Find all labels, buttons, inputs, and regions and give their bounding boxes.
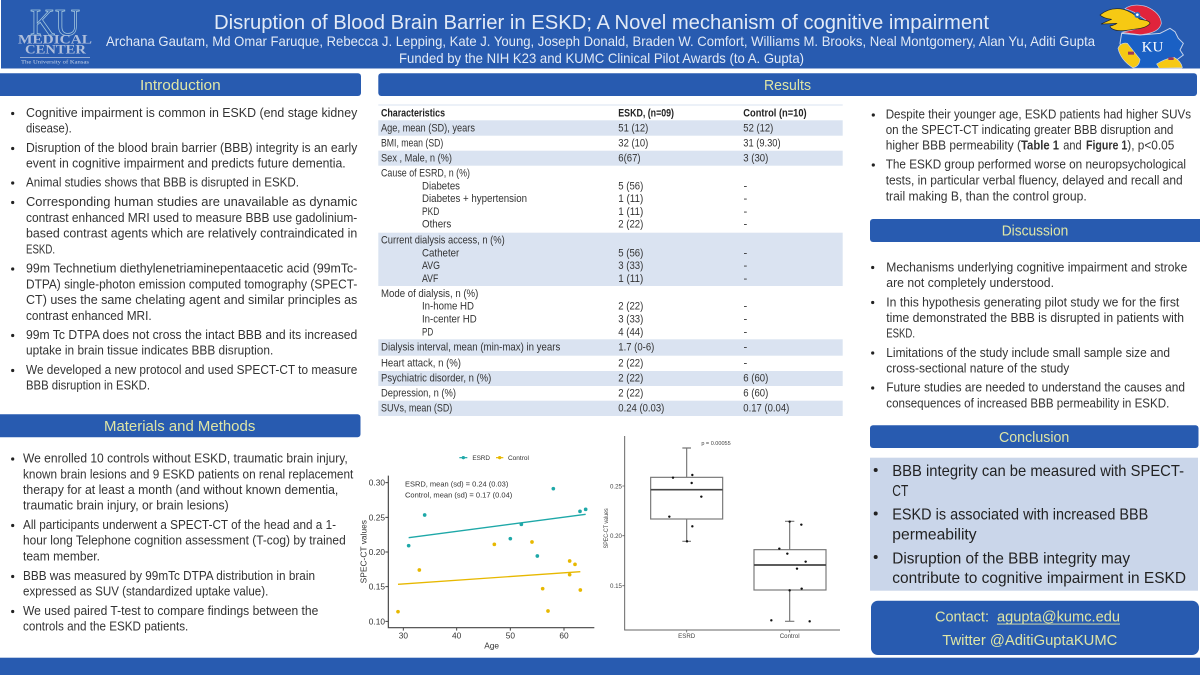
text block: conclusion bullets: ESKD is associated with increased BBB	[892, 506, 1148, 523]
text block: results bullets: and	[1063, 138, 1082, 152]
text block: discussion bullets: time demonstrated the BBB is disrupted in patients with	[886, 311, 1184, 325]
text block: introduction bullets: ESKD.	[26, 242, 55, 256]
text block: methods bullets: All participants underwent a SPECT-CT of the head and a 1-	[23, 518, 336, 532]
legend: Control	[508, 455, 529, 462]
table: patient characteristics: -	[744, 273, 748, 285]
text block: introduction bullets: contrast enhanced MRI used to measure BBB use gadolinium-	[26, 211, 357, 225]
legend	[459, 455, 529, 462]
table: patient characteristics: Current dialysis access, n (%)	[381, 235, 505, 247]
table: patient characteristics: PKD	[422, 206, 439, 218]
box: Control	[754, 520, 826, 623]
table: patient characteristics: -	[744, 260, 748, 272]
text block: introduction bullets: 99m Tc DTPA does not cross the intact BBB and its increased	[26, 328, 357, 342]
authors: Archana Gautam, Md Omar Faruque, Rebecca J. Lepping, Kate J. Young, Joseph Donald, Braden W. Comfort, Williams M. Brooks, Neal Montgomery, Alan Yu, Aditi Gupta	[106, 34, 1095, 49]
table: patient characteristics: Control (n=10)	[743, 107, 807, 119]
panel: materials and methods	[0, 414, 360, 634]
panel: discussion	[870, 219, 1200, 410]
text block: results bullets: tests, in particular verbal fluency, delayed and recall and	[886, 173, 1183, 187]
table: patient characteristics: Others	[422, 219, 452, 231]
axes: 40	[452, 631, 462, 641]
table: patient characteristics: -	[744, 357, 748, 369]
axes: 0.25	[369, 512, 385, 522]
table: patient characteristics: -	[744, 326, 748, 338]
table: patient characteristics: In-center HD	[422, 314, 477, 326]
table: patient characteristics: 1.7 (0-6)	[618, 342, 654, 354]
text block: introduction bullets: Animal studies shows that BBB is disrupted in ESKD.	[26, 176, 299, 190]
table: patient characteristics: 52 (12)	[743, 122, 773, 134]
text block: introduction bullets: BBB disruption in ESKD.	[26, 379, 150, 393]
title: Disruption of Blood Brain Barrier in ESKD; A Novel mechanism of cognitive impairment	[214, 12, 989, 34]
table: patient characteristics: -	[744, 314, 748, 326]
table: patient characteristics: Mode of dialysis, n (%)	[381, 288, 479, 300]
text block: introduction bullets: DTPA) single-photon emission computed tomography (SPECT-	[26, 277, 357, 291]
text block: methods bullets: therapy for at least a month (and without known dementia,	[23, 483, 338, 497]
axes: ESRD	[678, 633, 696, 640]
table: patient characteristics: 3 (30)	[743, 152, 768, 164]
annotation: group means: Control, mean (sd) = 0.17 (0.04)	[405, 493, 512, 500]
table: patient characteristics: -	[744, 301, 748, 313]
table: patient characteristics: 1 (11)	[618, 273, 643, 285]
text block: methods bullets: team member.	[23, 550, 100, 564]
table: patient characteristics: 2 (22)	[618, 387, 643, 399]
table: patient characteristics: -	[744, 180, 748, 192]
text block: methods bullets: known brain lesions and 9 ESKD patients on renal replacement	[23, 467, 354, 481]
table: patient characteristics: 1 (11)	[618, 206, 643, 218]
table: patient characteristics: Characteristics	[381, 107, 445, 119]
text block: methods bullets	[11, 452, 354, 634]
text block: conclusion bullets: Disruption of the BBB integrity may	[892, 550, 1130, 567]
text block: conclusion bullets: permeability	[892, 526, 977, 543]
table: patient characteristics: 3 (33)	[618, 314, 643, 326]
axes: SPEC-CT values	[604, 508, 610, 548]
table: patient characteristics: 0.17 (0.04)	[743, 402, 789, 414]
axes: 0.20	[369, 547, 385, 557]
p-value: p = 0.00055	[701, 441, 731, 447]
table: patient characteristics: 1 (11)	[618, 193, 643, 205]
table: patient characteristics: AVG	[422, 260, 440, 272]
table: patient characteristics: Catheter	[422, 247, 459, 259]
text block: discussion bullets: consequences of increased BBB permeability in ESKD.	[886, 396, 1169, 410]
table: patient characteristics: Diabetes	[422, 180, 460, 192]
axes: SPEC-CT values	[360, 520, 369, 583]
text block: conclusion bullets: CT	[892, 483, 909, 500]
text block: results bullets: trail making B, than the control group.	[886, 189, 1087, 203]
table: patient characteristics: 2 (22)	[618, 301, 643, 313]
text block: methods bullets: traumatic brain injury, or brain lesions)	[23, 499, 229, 513]
text block: methods bullets: BBB was measured by 99mTc DTPA distribution in brain	[23, 569, 315, 583]
text block: results bullets: Figure 1	[1086, 138, 1127, 152]
text block: methods bullets: controls and the ESKD patients.	[23, 620, 188, 634]
heading: Conclusion	[870, 425, 1198, 448]
panel: contact: Twitter @AditiGuptaKUMC	[942, 633, 1117, 649]
text block: introduction bullets: event in cognitive impairment and predicts future dementia.	[26, 156, 346, 170]
table: patient characteristics: 5 (56)	[618, 180, 643, 192]
text block: introduction bullets	[11, 106, 358, 393]
axes: 60	[559, 631, 569, 641]
panel: results	[360, 73, 1197, 650]
text block: results bullets: on the SPECT-CT indicating greater BBB disruption and	[886, 123, 1173, 137]
logo: KU Medical Center: CENTER	[25, 42, 87, 56]
icon: Jayhawk mascot	[1100, 5, 1183, 68]
table: patient characteristics: 2 (22)	[618, 219, 643, 231]
text block: results bullets	[872, 108, 1191, 203]
axes: 50	[506, 631, 515, 641]
panel: contact: agupta@kumc.edu	[997, 610, 1120, 626]
heading: Discussion	[870, 219, 1200, 242]
legend: ESRD	[472, 455, 490, 462]
panel: contact: Contact:	[935, 610, 989, 626]
text block: introduction bullets: Corresponding human studies are unavailable as dynamic	[26, 195, 357, 209]
table: patient characteristics: -	[744, 247, 748, 259]
table: patient characteristics: 31 (9.30)	[743, 137, 781, 149]
axes: 0.15	[369, 582, 385, 592]
icon: Jayhawk mascot: KU	[1142, 40, 1164, 56]
text block: discussion bullets: are not completely understood.	[886, 276, 1054, 290]
text block: discussion bullets: ESKD.	[886, 327, 915, 341]
table: patient characteristics: SUVs, mean (SD)	[381, 402, 452, 414]
table: patient characteristics: Psychiatric disorder, n (%)	[381, 372, 491, 384]
table: patient characteristics: 6 (60)	[743, 387, 768, 399]
axes: 0.25	[610, 483, 623, 490]
table: patient characteristics: -	[744, 342, 748, 354]
text block: discussion bullets: In this hypothesis generating pilot study we for the first	[886, 295, 1180, 309]
table: patient characteristics: Depression, n (%)	[381, 387, 456, 399]
funding line: Funded by the NIH K23 and KUMC Clinical Pilot Awards (to A. Gupta)	[399, 51, 804, 66]
table: patient characteristics: 4 (44)	[618, 326, 643, 338]
text block: results bullets: ), p<0.05	[1127, 138, 1174, 152]
text block: results bullets: higher BBB permeability (	[886, 138, 1022, 152]
table: patient characteristics: 6(67)	[618, 152, 641, 164]
table: patient characteristics: 0.24 (0.03)	[618, 402, 664, 414]
table: patient characteristics: ESKD, (n=09)	[618, 107, 674, 119]
text block: introduction bullets: uptake in brain tissue indicates BBB disruption.	[26, 344, 273, 358]
axes: 30	[399, 631, 408, 641]
annotation: group means	[405, 481, 512, 500]
panel: contact	[871, 601, 1199, 655]
table: patient characteristics: 51 (12)	[618, 122, 648, 134]
table: patient characteristics	[378, 104, 843, 416]
text block: introduction bullets: disease).	[26, 121, 72, 135]
axes: 0.30	[369, 478, 385, 488]
heading: Materials and Methods	[0, 414, 360, 437]
heading: Conclusion: Conclusion	[999, 430, 1069, 446]
series: ESRD	[407, 487, 587, 558]
text block: discussion bullets: Limitations of the study include small sample size and	[886, 346, 1170, 360]
logo: KU Medical Center: KU	[30, 2, 80, 44]
axes: 0.20	[610, 533, 623, 540]
axes	[604, 436, 840, 640]
panel: introduction	[0, 73, 361, 393]
footer bar	[0, 658, 1200, 675]
chart: scatter plot of SPECT-CT values by age	[360, 455, 594, 650]
text block: discussion bullets: Future studies are needed to understand the causes and	[886, 381, 1185, 395]
text block: methods bullets: hour long Telephone cognition assessment (T-cog) by trained	[23, 534, 346, 548]
text block: methods bullets: We used paired T-test to compare findings between the	[23, 604, 318, 618]
chart: box plot of SPECT-CT values	[604, 436, 840, 640]
axes: Control	[780, 633, 800, 640]
text block: conclusion bullets	[870, 458, 1198, 591]
table: patient characteristics: 6 (60)	[743, 372, 768, 384]
text block: conclusion bullets: contribute to cognitive impairment in ESKD	[892, 570, 1186, 587]
text block: methods bullets: expressed as SUV (standardized uptake value).	[23, 585, 268, 599]
table: patient characteristics: Heart attack, n (%)	[381, 357, 461, 369]
table: patient characteristics: 32 (10)	[618, 137, 648, 149]
text block: introduction bullets: contrast enhanced MRI.	[26, 309, 152, 323]
table: patient characteristics: In-home HD	[422, 301, 474, 313]
logo: KU Medical Center	[18, 2, 92, 66]
text block: introduction bullets: Cognitive impairment is common in ESKD (end stage kidney	[26, 106, 358, 120]
table: patient characteristics: 2 (22)	[618, 357, 643, 369]
header banner	[1, 0, 1200, 68]
text block: discussion bullets	[871, 260, 1187, 410]
logo: KU Medical Center: MEDICAL	[18, 32, 92, 46]
text block: introduction bullets: 99m Technetium diethylenetriaminepentaacetic acid (99mTc-	[26, 262, 357, 276]
text block: conclusion bullets: BBB integrity can be measured with SPECT-	[892, 463, 1184, 480]
logo: KU Medical Center: The University of Kansas	[21, 60, 89, 66]
table: patient characteristics: 3 (33)	[618, 260, 643, 272]
axes	[360, 476, 594, 650]
heading: Introduction: Introduction	[140, 78, 221, 94]
axes: 0.10	[369, 616, 385, 626]
text block: introduction bullets: We developed a new protocol and used SPECT-CT to measure	[26, 363, 357, 377]
table: patient characteristics: -	[744, 206, 748, 218]
panel: conclusion	[870, 425, 1198, 591]
text block: introduction bullets: CT) uses the same chelating agent and similar principles as	[26, 293, 357, 307]
heading: Materials and Methods: Materials and Methods	[104, 419, 255, 435]
table: patient characteristics: Age, mean (SD), years	[381, 122, 475, 134]
annotation: group means: ESRD, mean (sd) = 0.24 (0.03)	[405, 481, 508, 488]
table: patient characteristics: PD	[422, 326, 433, 338]
heading: Discussion: Discussion	[1002, 224, 1068, 240]
table: patient characteristics: -	[744, 193, 748, 205]
text block: discussion bullets: cross-sectional nature of the study	[886, 361, 1070, 375]
table: patient characteristics: Dialysis interval, mean (min-max) in years	[381, 342, 561, 354]
table: patient characteristics: BMI, mean (SD)	[381, 137, 443, 149]
text block: results bullets: The ESKD group performed worse on neuropsychological	[886, 158, 1186, 172]
series: Control	[396, 540, 582, 613]
box: ESRD	[651, 448, 723, 543]
table: patient characteristics: 5 (56)	[618, 247, 643, 259]
heading: Results: Results	[764, 78, 811, 94]
text block: introduction bullets: Disruption of the blood brain barrier (BBB) integrity is an early	[26, 141, 358, 155]
text block: results bullets: Table 1	[1021, 138, 1059, 152]
text block: methods bullets: We enrolled 10 controls without ESKD, traumatic brain injury,	[23, 452, 348, 466]
axes: 0.15	[610, 583, 623, 590]
table: patient characteristics: Cause of ESRD, n (%)	[381, 167, 470, 179]
table: patient characteristics: Diabetes + hypertension	[422, 193, 527, 205]
axes: Age	[484, 640, 499, 650]
heading: Introduction	[0, 73, 361, 96]
table: patient characteristics: 2 (22)	[618, 372, 643, 384]
table: patient characteristics: -	[744, 219, 748, 231]
text block: introduction bullets: based contrast agents which are relatively contraindicated in	[26, 227, 357, 241]
heading: Results	[378, 73, 1197, 96]
text block: discussion bullets: Mechanisms underlying cognitive impairment and stroke	[886, 260, 1187, 274]
table: patient characteristics: Sex , Male, n (%)	[381, 152, 452, 164]
table: patient characteristics: AVF	[422, 273, 438, 285]
